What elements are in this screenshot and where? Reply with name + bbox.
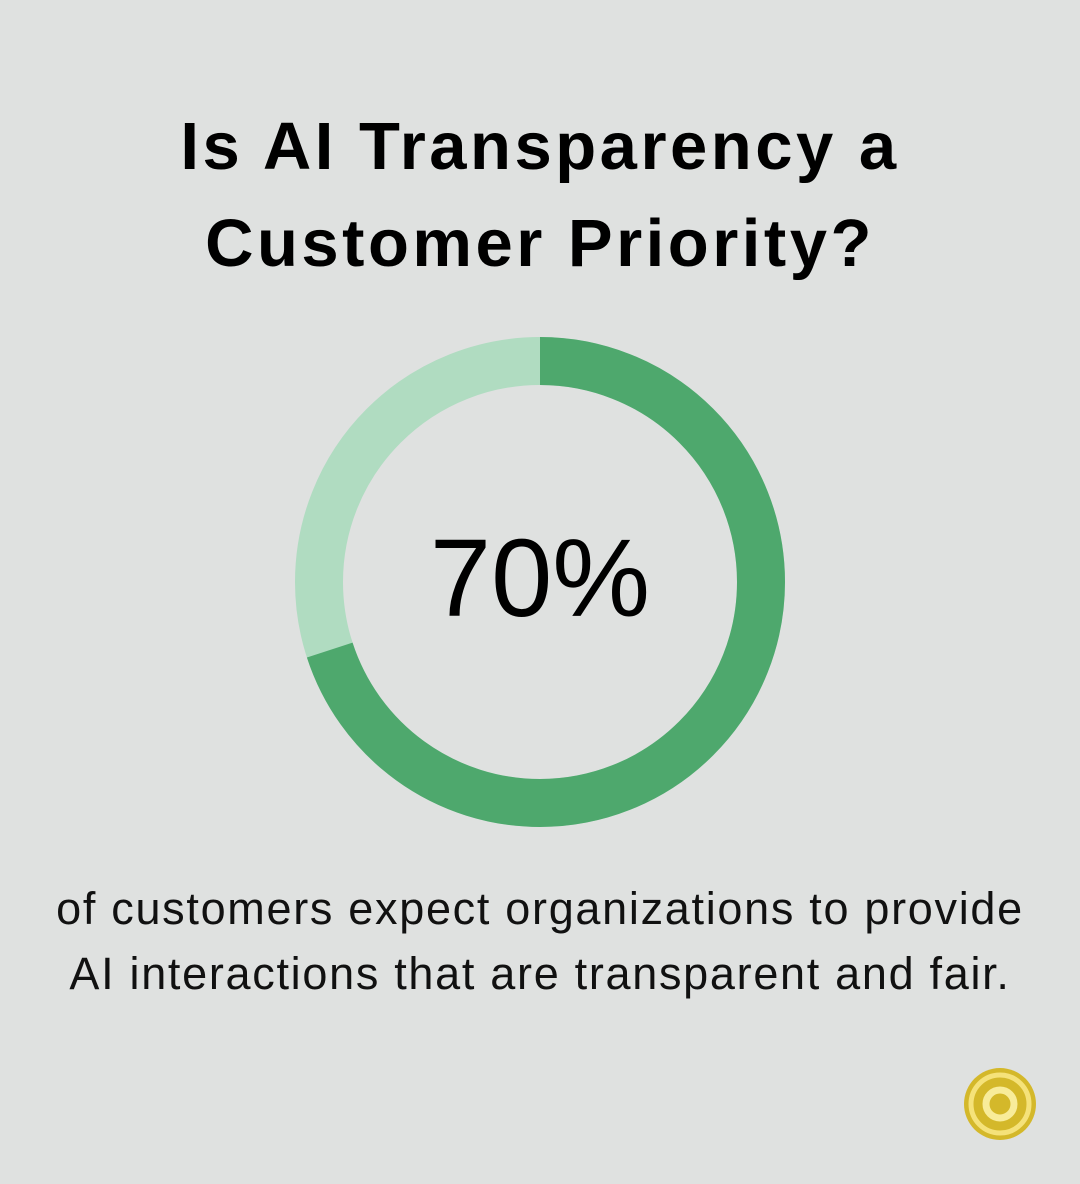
donut chart: 70%: [430, 517, 650, 640]
title: [180, 109, 900, 281]
description text: AI interactions that are transparent and fair.: [69, 948, 1011, 999]
icon: logo: [964, 1068, 1036, 1140]
title: Is AI Transparency a: [180, 109, 900, 184]
description text: [56, 883, 1024, 999]
description text: of customers expect organizations to provide: [56, 883, 1024, 934]
title: Customer Priority?: [205, 206, 875, 281]
